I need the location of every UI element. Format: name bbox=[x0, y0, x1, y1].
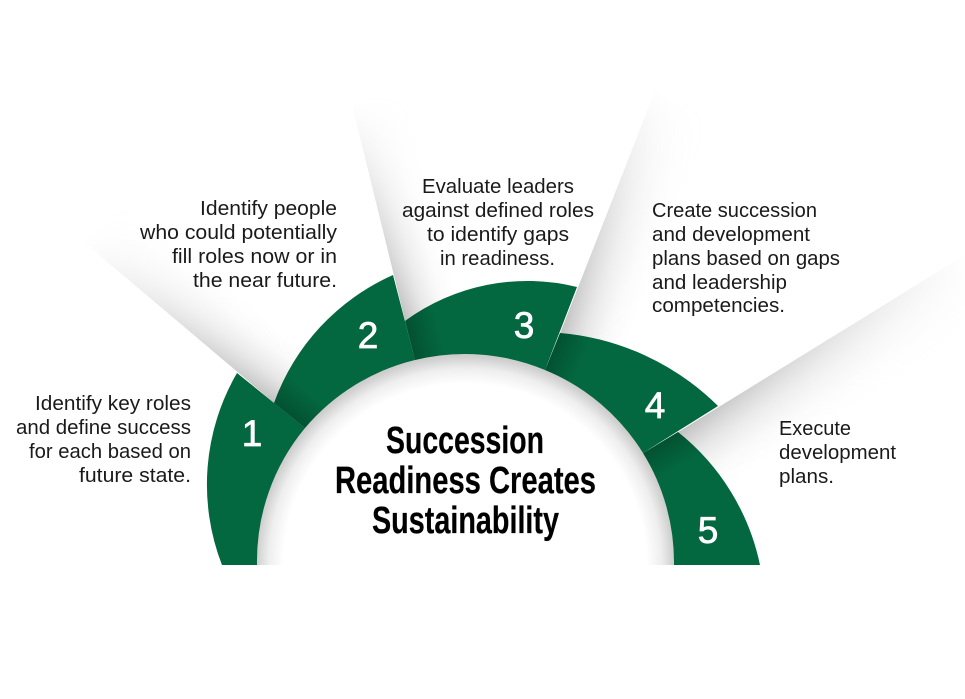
text: step 4: and development bbox=[652, 224, 810, 246]
text: step 3: to identify gaps bbox=[427, 224, 569, 246]
text: step 2: fill roles now or in bbox=[172, 246, 337, 268]
shadow ray: step 2 bbox=[360, 135, 436, 321]
text: step 4 bbox=[652, 200, 840, 317]
text: step 1: Identify key roles bbox=[35, 393, 191, 415]
text: step 4: and leadership bbox=[652, 272, 787, 294]
text: step 1: for each based on bbox=[29, 441, 191, 463]
text: step 5: development bbox=[779, 442, 896, 464]
segment 5 bbox=[635, 427, 760, 565]
number 4: 4 bbox=[645, 385, 665, 426]
segment 1 bbox=[207, 373, 305, 565]
text: step 4: Create succession bbox=[652, 200, 817, 222]
text: step 1: future state. bbox=[79, 465, 191, 487]
title bbox=[335, 420, 596, 542]
number 2: 2 bbox=[358, 315, 378, 356]
shadow ray: step 1 bbox=[112, 264, 291, 402]
segment 4 bbox=[542, 324, 718, 453]
shadow ray: step 4 bbox=[678, 280, 926, 466]
shadow ray: step 3 bbox=[560, 126, 646, 340]
title: Sustainability bbox=[372, 500, 559, 542]
text: step 2 bbox=[139, 198, 337, 292]
text: step 5: Execute bbox=[779, 418, 851, 440]
text: step 2: the near future. bbox=[193, 270, 337, 292]
text: step 3: in readiness. bbox=[440, 248, 555, 270]
title: Succession bbox=[386, 420, 544, 462]
text: step 4: plans based on gaps bbox=[652, 248, 840, 270]
text: step 1 bbox=[16, 393, 191, 487]
text: step 3: Evaluate leaders bbox=[422, 176, 574, 198]
title: Readiness Creates bbox=[335, 460, 596, 502]
text: step 1: and define success bbox=[16, 417, 191, 439]
segment 2 bbox=[266, 275, 415, 435]
text: step 2: Identify people bbox=[200, 198, 337, 220]
number 5: 5 bbox=[698, 510, 718, 551]
segment 3 bbox=[403, 281, 577, 370]
inner half circle with rim shadow bbox=[249, 349, 681, 565]
number 3: 3 bbox=[514, 305, 534, 346]
text: step 5: plans. bbox=[779, 466, 834, 488]
text: step 3: against defined roles bbox=[402, 200, 594, 222]
number 1: 1 bbox=[242, 413, 262, 454]
text: step 2: who could potentially bbox=[139, 222, 337, 244]
text: step 4: competencies. bbox=[652, 295, 785, 317]
text: step 5 bbox=[779, 418, 896, 488]
text: step 3 bbox=[402, 176, 594, 270]
